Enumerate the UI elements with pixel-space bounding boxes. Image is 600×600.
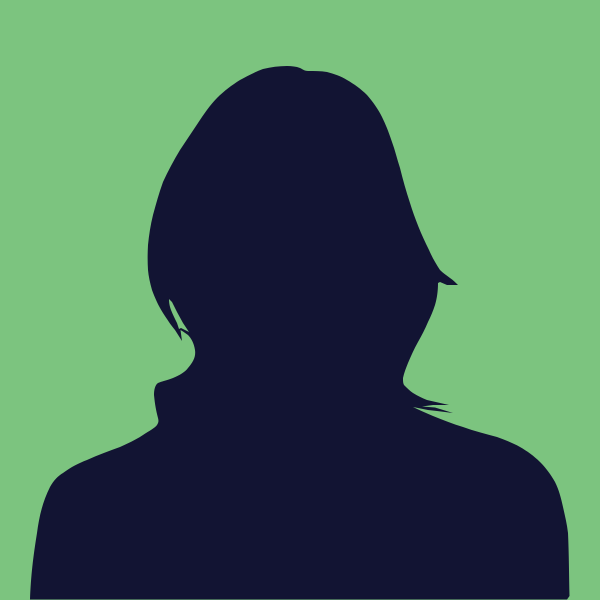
icon: hair sliver [169,299,189,332]
icon: woman silhouette [30,66,570,600]
